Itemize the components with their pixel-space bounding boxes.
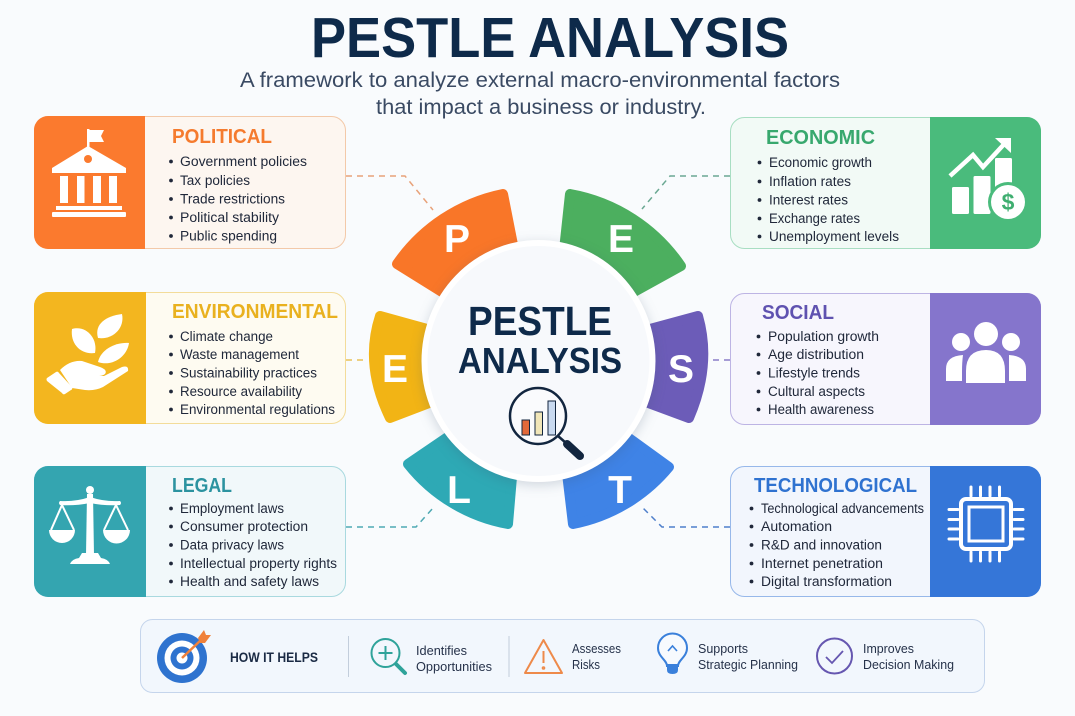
connector: economic	[642, 176, 730, 209]
heading: technological: TECHNOLOGICAL	[754, 475, 917, 497]
icon: scales of justice	[49, 486, 130, 564]
list: environmental: Environmental regulations	[180, 402, 335, 417]
segment letter: T: T	[608, 469, 632, 512]
text: supports strategic planning: Supports	[698, 642, 748, 656]
list: social: Lifestyle trends	[768, 366, 860, 380]
panel: technological	[730, 466, 1041, 597]
text: assesses risks: Assesses	[572, 642, 621, 656]
text: supports strategic planning	[698, 642, 798, 672]
list: technological	[750, 501, 924, 589]
list: social: Cultural aspects	[768, 384, 865, 399]
center hub	[424, 243, 652, 479]
subtitle	[240, 69, 840, 119]
list: economic: Economic growth	[769, 155, 872, 170]
text: improves decision making: Improves	[863, 642, 914, 656]
title: PESTLE ANALYSIS	[311, 6, 789, 70]
icon: magnifier with bars	[510, 388, 580, 456]
connector: legal	[346, 508, 433, 527]
text: identifies opportunities	[416, 644, 492, 674]
heading: social: SOCIAL	[762, 302, 834, 324]
icon: government building	[52, 129, 126, 217]
list: technological: Internet penetration	[761, 556, 883, 571]
icon: hand with leaves	[46, 314, 129, 394]
list: economic: Inflation rates	[769, 174, 851, 189]
icon: light bulb	[658, 634, 687, 674]
segment: P	[397, 194, 514, 297]
connector: social	[712, 359, 730, 361]
connector: political	[346, 176, 433, 210]
icon: target with arrow	[157, 630, 211, 683]
segment: L	[408, 432, 513, 524]
list: legal: Intellectual property rights	[180, 556, 337, 571]
list: environmental: Climate change	[180, 329, 273, 344]
list: environmental: Waste management	[180, 347, 299, 362]
text: assesses risks: Risks	[572, 658, 600, 672]
center title: PESTLE	[468, 298, 612, 344]
segment: E economic	[564, 194, 681, 297]
icon: people group	[946, 322, 1026, 383]
list: technological: Automation	[761, 519, 832, 534]
text: assesses risks	[572, 642, 621, 672]
list: social	[757, 329, 879, 417]
list: economic: Interest rates	[769, 192, 848, 208]
list: environmental: Sustainability practices	[180, 366, 317, 380]
segment: E environmental	[374, 316, 445, 418]
subtitle: A framework to analyze external macro-environmental factors	[240, 69, 840, 92]
heading: environmental: ENVIRONMENTAL	[172, 301, 338, 323]
list: environmental	[169, 329, 335, 417]
list: social: Age distribution	[768, 347, 864, 362]
list: political	[169, 154, 307, 244]
text: improves decision making	[863, 642, 954, 672]
connector: technological	[643, 508, 730, 527]
bottom bar: how it helps	[140, 620, 984, 692]
segment: T	[566, 433, 669, 524]
panel: legal	[34, 466, 346, 597]
text: identifies opportunities: Identifies	[416, 644, 467, 658]
list: environmental: Resource availability	[180, 384, 302, 399]
list: technological: R&D and innovation	[761, 538, 882, 552]
list: legal	[169, 501, 337, 589]
list: legal: Employment laws	[180, 501, 284, 516]
list: technological: Digital transformation	[761, 574, 892, 589]
text: improves decision making: Decision Making	[863, 658, 954, 672]
list: legal: Health and safety laws	[180, 574, 319, 589]
list: political: Government policies	[180, 154, 307, 169]
text: supports strategic planning: Strategic Planning	[698, 658, 798, 672]
icon: microchip	[949, 487, 1023, 561]
icon: growth chart with coin: $	[1002, 189, 1015, 215]
connector: environmental	[346, 359, 364, 361]
icon: magnifier with plus	[372, 639, 405, 673]
icon: growth chart with coin	[950, 138, 1028, 222]
icon: warning triangle	[525, 640, 562, 673]
list: political: Tax policies	[180, 173, 250, 188]
subtitle: that impact a business or industry.	[376, 96, 706, 119]
icon: check circle	[817, 638, 852, 674]
list: social: Health awareness	[768, 402, 874, 417]
panel: political	[34, 116, 346, 249]
list: legal: Data privacy laws	[180, 538, 284, 552]
segment letter: L: L	[447, 469, 471, 512]
list: economic: Unemployment levels	[769, 229, 899, 244]
panel: social	[730, 293, 1041, 425]
panel: environmental	[34, 292, 346, 424]
list: economic	[758, 155, 899, 244]
heading: economic: ECONOMIC	[766, 127, 875, 149]
center subtitle: ANALYSIS	[458, 340, 622, 381]
list: political: Public spending	[180, 228, 277, 244]
segment: S	[635, 316, 703, 418]
heading: legal: LEGAL	[172, 475, 232, 497]
list: political: Trade restrictions	[180, 192, 285, 206]
list: social: Population growth	[768, 329, 879, 344]
panel: economic	[730, 117, 1041, 249]
segment letter: E economic: E	[608, 218, 634, 261]
segment letter: S: S	[668, 348, 694, 391]
label: how it helps: HOW IT HELPS	[230, 650, 318, 665]
list: political: Political stability	[180, 210, 279, 225]
segment letter: E environmental: E	[382, 348, 408, 391]
list: economic: Exchange rates	[769, 211, 860, 226]
heading: political: POLITICAL	[172, 126, 272, 148]
list: technological: Technological advancements	[761, 501, 924, 516]
segment letter: P: P	[444, 218, 470, 261]
text: identifies opportunities: Opportunities	[416, 660, 492, 674]
list: legal: Consumer protection	[180, 519, 308, 534]
